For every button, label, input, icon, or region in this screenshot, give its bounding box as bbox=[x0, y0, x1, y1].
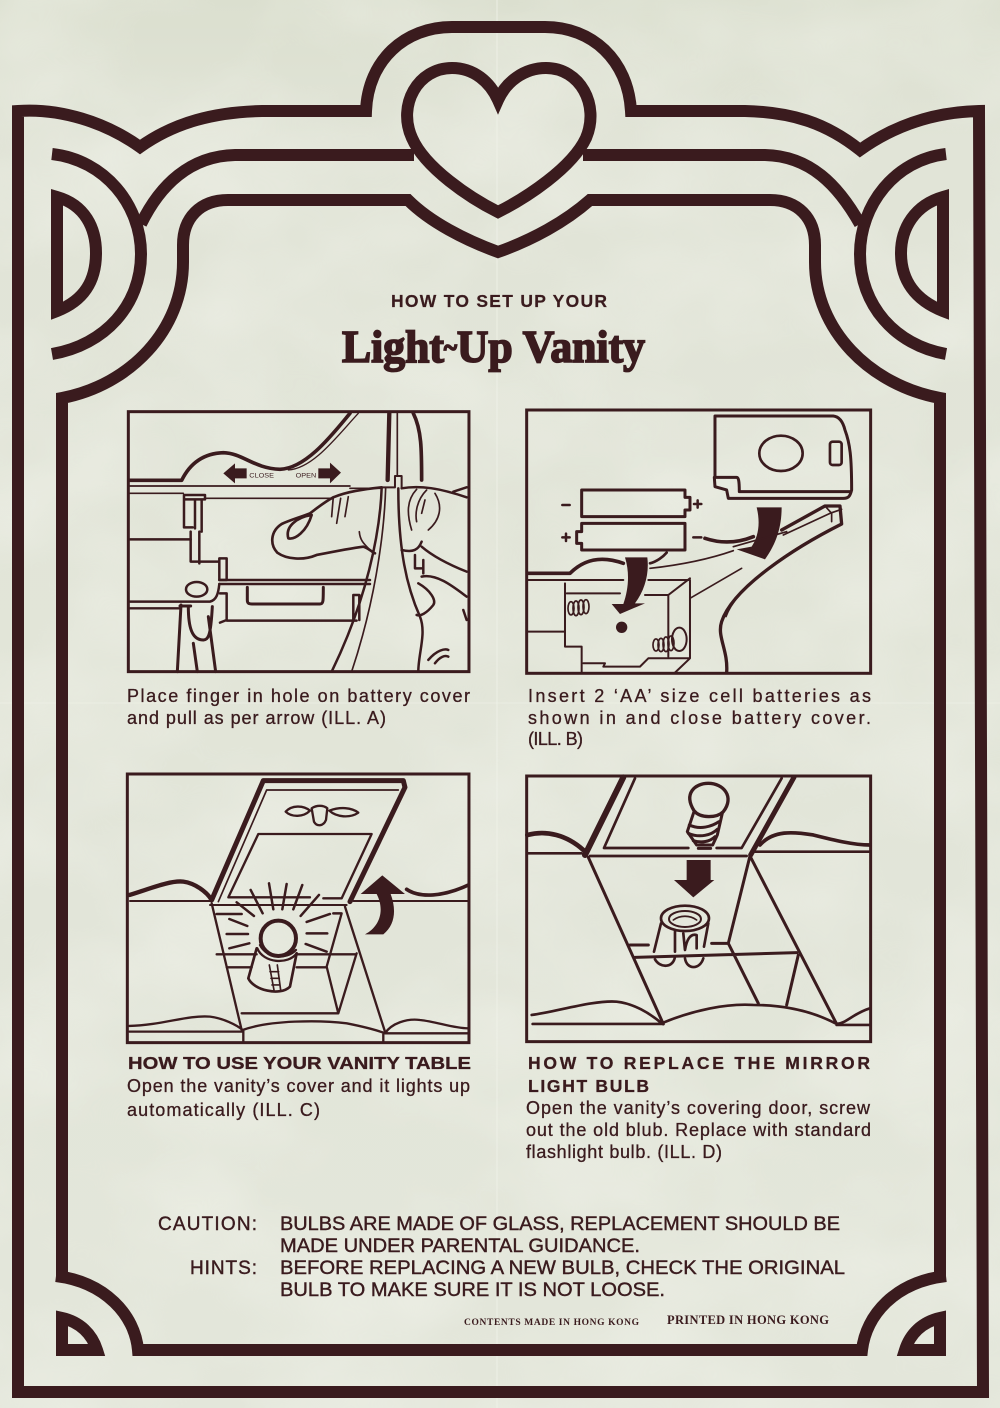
caution and hints bbox=[158, 1214, 845, 1301]
text block: how to replace the mirror light bulb: out the old blub. Replace with standard bbox=[526, 1120, 871, 1140]
frame C bbox=[127, 774, 469, 1043]
arrows close and open: OPEN bbox=[296, 473, 317, 480]
bottom-left corner ornament bbox=[62, 1318, 97, 1350]
text block: instruction A bbox=[127, 686, 470, 728]
frame D bbox=[527, 776, 871, 1042]
bottom inner frame line bbox=[56, 1276, 946, 1350]
text block: how to replace the mirror light bulb: flashlight bulb. (ILL. D) bbox=[526, 1142, 722, 1162]
arrows close and open bbox=[223, 463, 341, 483]
heading: how to set up your: HOW TO SET UP YOUR bbox=[391, 291, 607, 311]
text block: how to use your vanity table: Open the vanity’s cover and it lights up bbox=[127, 1076, 470, 1096]
text block: instruction A: and pull as per arrow (ILL. A) bbox=[127, 708, 386, 728]
vanity lid bbox=[212, 781, 405, 902]
panel A: illustration of battery cover bbox=[128, 412, 469, 672]
curved up arrow bbox=[361, 875, 405, 934]
left D ornament bbox=[57, 197, 96, 311]
arrows close and open: CLOSE bbox=[249, 473, 275, 480]
right corner arc bbox=[860, 154, 946, 354]
text block: how to replace the mirror light bulb bbox=[526, 1053, 871, 1162]
caution and hints: BEFORE REPLACING A NEW BULB, CHECK THE ORIGINAL bbox=[280, 1258, 845, 1279]
second band right bbox=[583, 155, 860, 224]
down arrow bbox=[674, 860, 714, 897]
text block: instruction B: (ILL. B) bbox=[528, 729, 583, 749]
battery cover bbox=[714, 416, 852, 498]
panel C: illustration of vanity lid opened with light bbox=[127, 774, 469, 1043]
caution and hints: CAUTION: bbox=[158, 1214, 257, 1235]
finger and hand bbox=[272, 487, 467, 663]
battery compartment with springs bbox=[528, 578, 690, 673]
vanity handle and base bbox=[528, 506, 842, 673]
caution and hints: MADE UNDER PARENTAL GUIDANCE. bbox=[280, 1236, 640, 1257]
text block: instruction B: Insert 2 ‘AA’ size cell batteries as bbox=[528, 686, 871, 706]
title: Light-Up Vanity: ~ bbox=[444, 333, 457, 362]
footer: printed in Hong Kong: PRINTED IN HONG KONG bbox=[667, 1313, 829, 1327]
footer: contents made in Hong Kong: CONTENTS MADE IN HONG KONG bbox=[464, 1318, 640, 1328]
panel B: illustration of battery insertion bbox=[527, 410, 871, 673]
title: Light-Up Vanity: Up Vanity bbox=[457, 321, 645, 372]
text block: how to replace the mirror light bulb: LIGHT BULB bbox=[528, 1076, 649, 1096]
text block: how to use your vanity table: automatically (ILL. C) bbox=[127, 1100, 320, 1120]
lid edges bbox=[585, 777, 794, 855]
text block: instruction B bbox=[528, 686, 871, 749]
light rays bbox=[217, 883, 341, 952]
inner frame with lower heart contour bbox=[62, 200, 940, 1282]
left corner arc bbox=[52, 154, 141, 354]
text block: instruction B: shown in and close battery cover. bbox=[528, 708, 871, 728]
socket bbox=[654, 906, 709, 967]
panel D: illustration of replacing bulb bbox=[527, 776, 871, 1042]
heart bbox=[407, 68, 591, 212]
new bulb bbox=[687, 783, 728, 848]
table surface lines and hills bbox=[129, 881, 468, 1042]
caution and hints: BULB TO MAKE SURE IT IS NOT LOOSE. bbox=[280, 1280, 665, 1301]
vanity top curve bbox=[129, 413, 422, 498]
lit bulb in socket bbox=[248, 921, 297, 992]
caution and hints: HINTS: bbox=[190, 1258, 257, 1279]
vanity mechanism bbox=[130, 495, 370, 672]
hills and table lines bbox=[527, 833, 870, 1025]
title: Light-Up Vanity: Light bbox=[342, 321, 449, 372]
caution and hints: BULBS ARE MADE OF GLASS, REPLACEMENT SHOULD BE bbox=[280, 1214, 840, 1235]
battery cover edges bbox=[332, 488, 423, 672]
second band left bbox=[141, 155, 414, 224]
compartment lines bbox=[588, 856, 837, 1024]
frame B bbox=[527, 410, 871, 673]
text block: how to use your vanity table bbox=[127, 1053, 471, 1120]
two AA batteries bbox=[577, 490, 690, 550]
text block: how to replace the mirror light bulb: HOW TO REPLACE THE MIRROR bbox=[528, 1053, 870, 1073]
curved arrows bbox=[612, 507, 782, 614]
polarity marks bbox=[562, 500, 701, 541]
compartment bbox=[212, 903, 385, 1032]
text block: instruction A: Place finger in hole on battery cover bbox=[127, 686, 470, 706]
bottom-right corner ornament bbox=[905, 1318, 940, 1350]
right D ornament bbox=[901, 197, 943, 311]
text block: how to replace the mirror light bulb: Open the vanity’s covering door, screw bbox=[526, 1098, 871, 1118]
frame A bbox=[128, 412, 469, 672]
text block: how to use your vanity table: HOW TO USE YOUR VANITY TABLE bbox=[128, 1053, 471, 1073]
